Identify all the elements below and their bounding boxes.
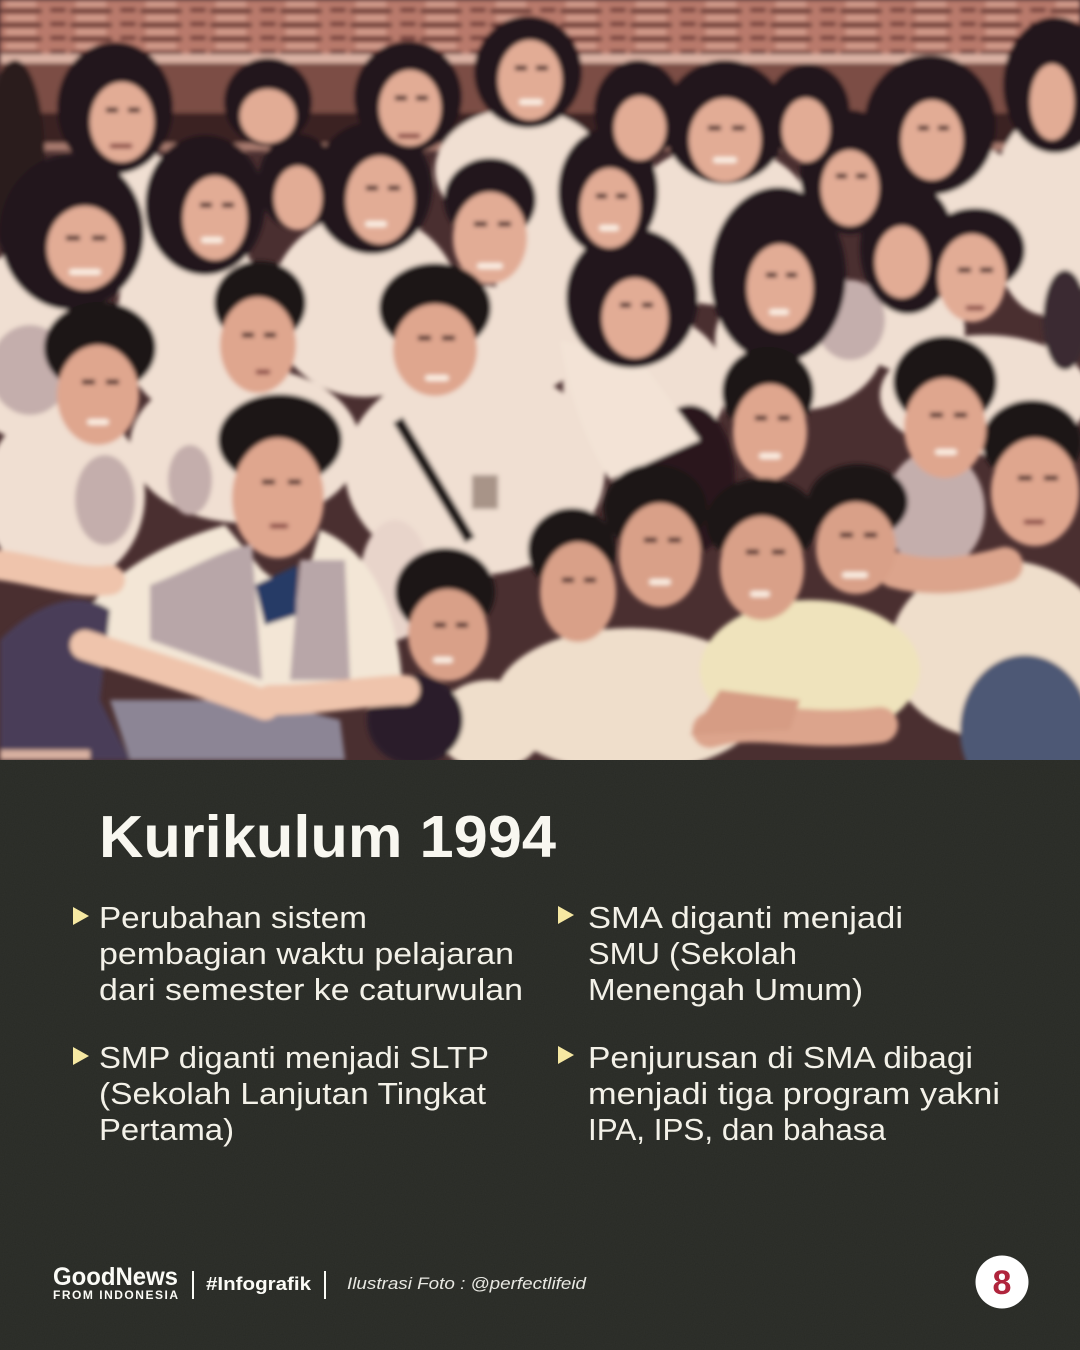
front hair <box>395 464 908 636</box>
bullet: sistem pembagian waktu: Perubahan sistem <box>99 900 367 935</box>
bullet: SMA menjadi SMU <box>558 900 903 1007</box>
bullet: SMA menjadi SMU: SMA diganti menjadi <box>588 900 903 935</box>
back hair <box>0 16 1080 368</box>
mouth shadow <box>112 136 1042 526</box>
divider and hashtag <box>192 1271 326 1299</box>
bullet: SMP menjadi SLTP: SMP diganti menjadi SLTP <box>99 1040 489 1075</box>
title: Kurikulum 1994 <box>99 804 556 870</box>
page number badge: 8 <box>993 1264 1011 1302</box>
logo: GoodNews from Indonesia: GoodNews <box>53 1263 178 1291</box>
bullet: penjurusan SMA <box>558 1040 1000 1147</box>
bullet: penjurusan SMA: menjadi tiga program yakni <box>588 1076 1000 1111</box>
logo: GoodNews from Indonesia <box>53 1263 178 1302</box>
bullet: SMP menjadi SLTP <box>73 1040 489 1147</box>
front faces <box>408 502 896 681</box>
photo credit: Ilustrasi Foto : @perfectlifeid <box>347 1274 587 1293</box>
bullet: penjurusan SMA: Penjurusan di SMA dibagi <box>588 1040 973 1075</box>
middle faces <box>57 297 1079 558</box>
eyes and brows <box>66 68 1058 625</box>
back faces <box>47 40 1074 358</box>
bullet: SMP menjadi SLTP: (Sekolah Lanjutan Tingkat <box>99 1076 486 1111</box>
smiles <box>72 102 954 660</box>
bullet: SMA menjadi SMU: SMU (Sekolah <box>588 936 797 971</box>
trousers <box>0 600 130 760</box>
bullet: sistem pembagian waktu: dari semester ke caturwulan <box>99 972 523 1007</box>
front shirts <box>72 525 402 700</box>
divider and hashtag: #Infografik <box>206 1274 312 1294</box>
panel: dark text area <box>0 760 1080 1350</box>
bullet: sistem pembagian waktu <box>73 900 523 1007</box>
bullet: penjurusan SMA: IPA, IPS, dan bahasa <box>588 1112 887 1147</box>
bullet: SMP menjadi SLTP: Pertama) <box>99 1112 234 1147</box>
bullet: sistem pembagian waktu: pembagian waktu pelajaran <box>99 936 514 971</box>
photo: group of students in white uniforms <box>0 0 1080 805</box>
logo: GoodNews from Indonesia: FROM INDONESIA <box>53 1288 178 1302</box>
page number badge <box>976 1256 1028 1308</box>
arms <box>0 565 405 705</box>
middle hair <box>44 261 1080 486</box>
bullet: SMA menjadi SMU: Menengah Umum) <box>588 972 863 1007</box>
